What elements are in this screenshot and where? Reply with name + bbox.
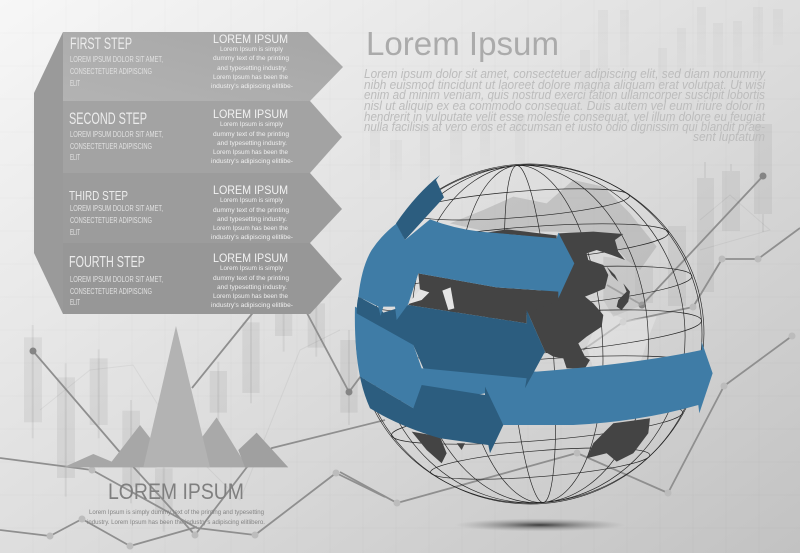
panel: fourth step: and typesetting industry.	[217, 284, 287, 291]
panel: third step: Lorem Ipsum is simply	[220, 197, 284, 204]
panel: first step: FIRST STEP	[70, 34, 132, 53]
lower description: Lorem Ipsum is simply dummy text of the printing and typesetting	[89, 509, 264, 516]
arrow: upper blue band	[358, 219, 574, 320]
panel: third step: LOREM IPSUM	[213, 185, 288, 197]
panel: four step arrows	[34, 32, 343, 314]
panel: first step: ELIT	[70, 78, 80, 88]
faint far-side land	[450, 180, 657, 368]
panel: fourth step: Lorem Ipsum is simply	[220, 265, 284, 272]
panel: third step: THIRD STEP	[69, 188, 128, 203]
panel: fourth step: LOREM IPSUM	[213, 253, 288, 265]
panel: first step: dummy text of the printing	[213, 55, 289, 62]
globe shadow	[455, 518, 625, 532]
arrow: lower long band	[355, 307, 713, 425]
arrow: middle dark band	[357, 297, 545, 388]
panel: first step: LOREM IPSUM DOLOR SIT AMET,	[70, 54, 163, 64]
candlestick chart: lower left	[24, 293, 358, 532]
lower description: industry. Lorem Ipsum has been the industry's adipiscing elitlibero.	[87, 519, 265, 526]
arrow: bottom dark band	[360, 377, 503, 453]
line chart: background trend lines	[0, 176, 800, 546]
panel: third step: dummy text of the printing	[213, 207, 289, 214]
dark continents	[408, 229, 650, 463]
panel: fourth step: industry's adipiscing elitlibe-	[211, 302, 293, 309]
panel: second step: LOREM IPSUM	[213, 109, 288, 121]
line chart: data markers	[30, 172, 796, 550]
panel: fourth step: LOREM IPSUM DOLOR SIT AMET,	[70, 274, 163, 284]
candlestick chart: faint upper bars	[370, 7, 783, 180]
globe with arrows	[324, 130, 736, 538]
panel: fourth step: Lorem Ipsum has been the	[213, 293, 288, 300]
panel: third step: LOREM IPSUM DOLOR SIT AMET,	[70, 203, 163, 213]
panel: first step: and typesetting industry.	[217, 65, 287, 72]
left fold of panel	[34, 32, 63, 314]
panel: fourth step: CONSECTETUER ADIPISCING	[70, 286, 152, 296]
panel: first step: industry's adipiscing elitlibe-	[211, 83, 293, 90]
panel: third step: Lorem Ipsum has been the	[213, 225, 288, 232]
panel: first step: Lorem Ipsum is simply	[220, 46, 284, 53]
body paragraph: nisl ut aliquip ex ea commodo consequat. Duis autem vel eum iriure dolor in	[364, 98, 765, 113]
body paragraph	[364, 66, 766, 144]
body paragraph: Lorem ipsum dolor sit amet, consectetuer adipiscing elit, sed diam nonummy	[364, 66, 766, 81]
panel: third step: ELIT	[70, 227, 80, 237]
panel: first step: LOREM IPSUM	[213, 34, 288, 46]
panel: third step: and typesetting industry.	[217, 216, 287, 223]
body paragraph: sent luptatum	[693, 129, 765, 144]
panel: fourth step: ELIT	[70, 297, 80, 307]
arrow: tail fold	[396, 175, 444, 240]
panel: fourth step: dummy text of the printing	[213, 275, 289, 282]
panel: second step: ELIT	[70, 152, 80, 162]
lower heading: LOREM IPSUM	[108, 479, 244, 504]
panel: second step: LOREM IPSUM DOLOR SIT AMET,	[70, 129, 163, 139]
panel: second step: dummy text of the printing	[213, 131, 289, 138]
panel: second step: Lorem Ipsum has been the	[213, 149, 288, 156]
panel: second step: CONSECTETUER ADIPISCING	[70, 141, 152, 151]
mountain chart	[63, 326, 288, 467]
panel: second step: Lorem Ipsum is simply	[220, 121, 284, 128]
panel: second step	[63, 101, 342, 173]
panel: third step: CONSECTETUER ADIPISCING	[70, 215, 152, 225]
body paragraph: hendrerit in vulputate velit esse molestie consequat, vel illum dolore eu feugiat	[364, 109, 766, 124]
panel: second step: SECOND STEP	[69, 109, 147, 128]
body paragraph: nibh euismod tincidunt ut laoreet dolore magna aliquam erat volutpat. Ut wisi	[364, 77, 766, 92]
panel: third step	[63, 173, 342, 243]
panel: fourth step	[63, 243, 342, 314]
globe wireframe	[324, 130, 736, 538]
panel: third step: industry's adipiscing elitlibe-	[211, 234, 293, 241]
candlestick chart: right side	[635, 124, 772, 306]
line chart: faint thin lines	[40, 195, 770, 500]
panel: fourth step: FOURTH STEP	[69, 254, 145, 271]
blue wrap-around arrows	[355, 175, 713, 453]
main title: Lorem Ipsum	[366, 25, 559, 62]
panel: second step: and typesetting industry.	[217, 140, 287, 147]
panel: first step: CONSECTETUER ADIPISCING	[70, 66, 152, 76]
lower description	[87, 509, 265, 526]
body paragraph: enim ad minim veniam, quis nostrud exerci tation ullamcorper suscipit lobortis	[364, 87, 765, 102]
panel: second step: industry's adipiscing elitlibe-	[211, 158, 293, 165]
panel: first step	[63, 32, 343, 101]
panel: first step: Lorem Ipsum has been the	[213, 74, 288, 81]
